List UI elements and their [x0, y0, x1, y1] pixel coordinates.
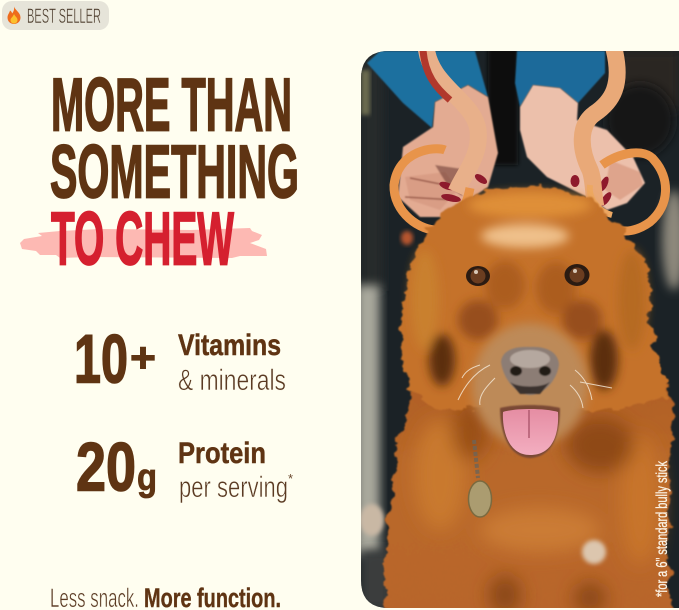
stat: protein — [76, 428, 293, 506]
right bully stick — [582, 45, 666, 231]
nose — [501, 347, 559, 395]
label vitamins: Vitamins — [178, 329, 281, 362]
hands — [398, 85, 645, 217]
dog head and ears — [401, 186, 668, 410]
badge: best seller — [2, 1, 109, 30]
dog body — [382, 362, 676, 608]
collar tag — [468, 481, 492, 517]
badge label: BEST SELLER — [27, 5, 101, 28]
label minerals: & minerals — [178, 364, 286, 397]
plus sign: + — [130, 334, 156, 381]
tongue — [503, 409, 558, 455]
brush stroke highlight — [20, 228, 267, 258]
photo backdrop — [356, 45, 679, 610]
open mouth — [500, 405, 560, 458]
title line 1: MORE THAN — [51, 62, 292, 146]
stat value 20: 20 — [76, 428, 136, 506]
stat: vitamins — [74, 320, 286, 398]
icon: flame — [8, 6, 20, 24]
footnote: *for a 6" standard bully stick — [654, 460, 671, 597]
left bully stick — [394, 45, 478, 230]
stat value 10: 10 — [74, 320, 128, 398]
title line 3: TO CHEW — [51, 196, 234, 280]
unit g: g — [137, 457, 157, 499]
left eye — [466, 266, 490, 286]
label protein: Protein — [178, 437, 266, 470]
tagline — [50, 583, 281, 610]
muzzle — [472, 323, 588, 447]
title line 2: SOMETHING — [50, 130, 299, 214]
fur shading — [414, 400, 660, 610]
sleeves — [367, 51, 605, 128]
right eye — [564, 264, 590, 286]
collar chain — [474, 440, 478, 478]
white chest spot — [582, 540, 606, 564]
head markings — [411, 192, 646, 390]
photo: golden retriever with bully stick antlers — [356, 45, 679, 610]
tongue crease — [528, 410, 530, 438]
asterisk: * — [288, 471, 293, 486]
label per serving: per serving — [179, 471, 288, 504]
whiskers — [458, 365, 612, 408]
title — [20, 62, 299, 280]
red nails — [439, 174, 612, 206]
